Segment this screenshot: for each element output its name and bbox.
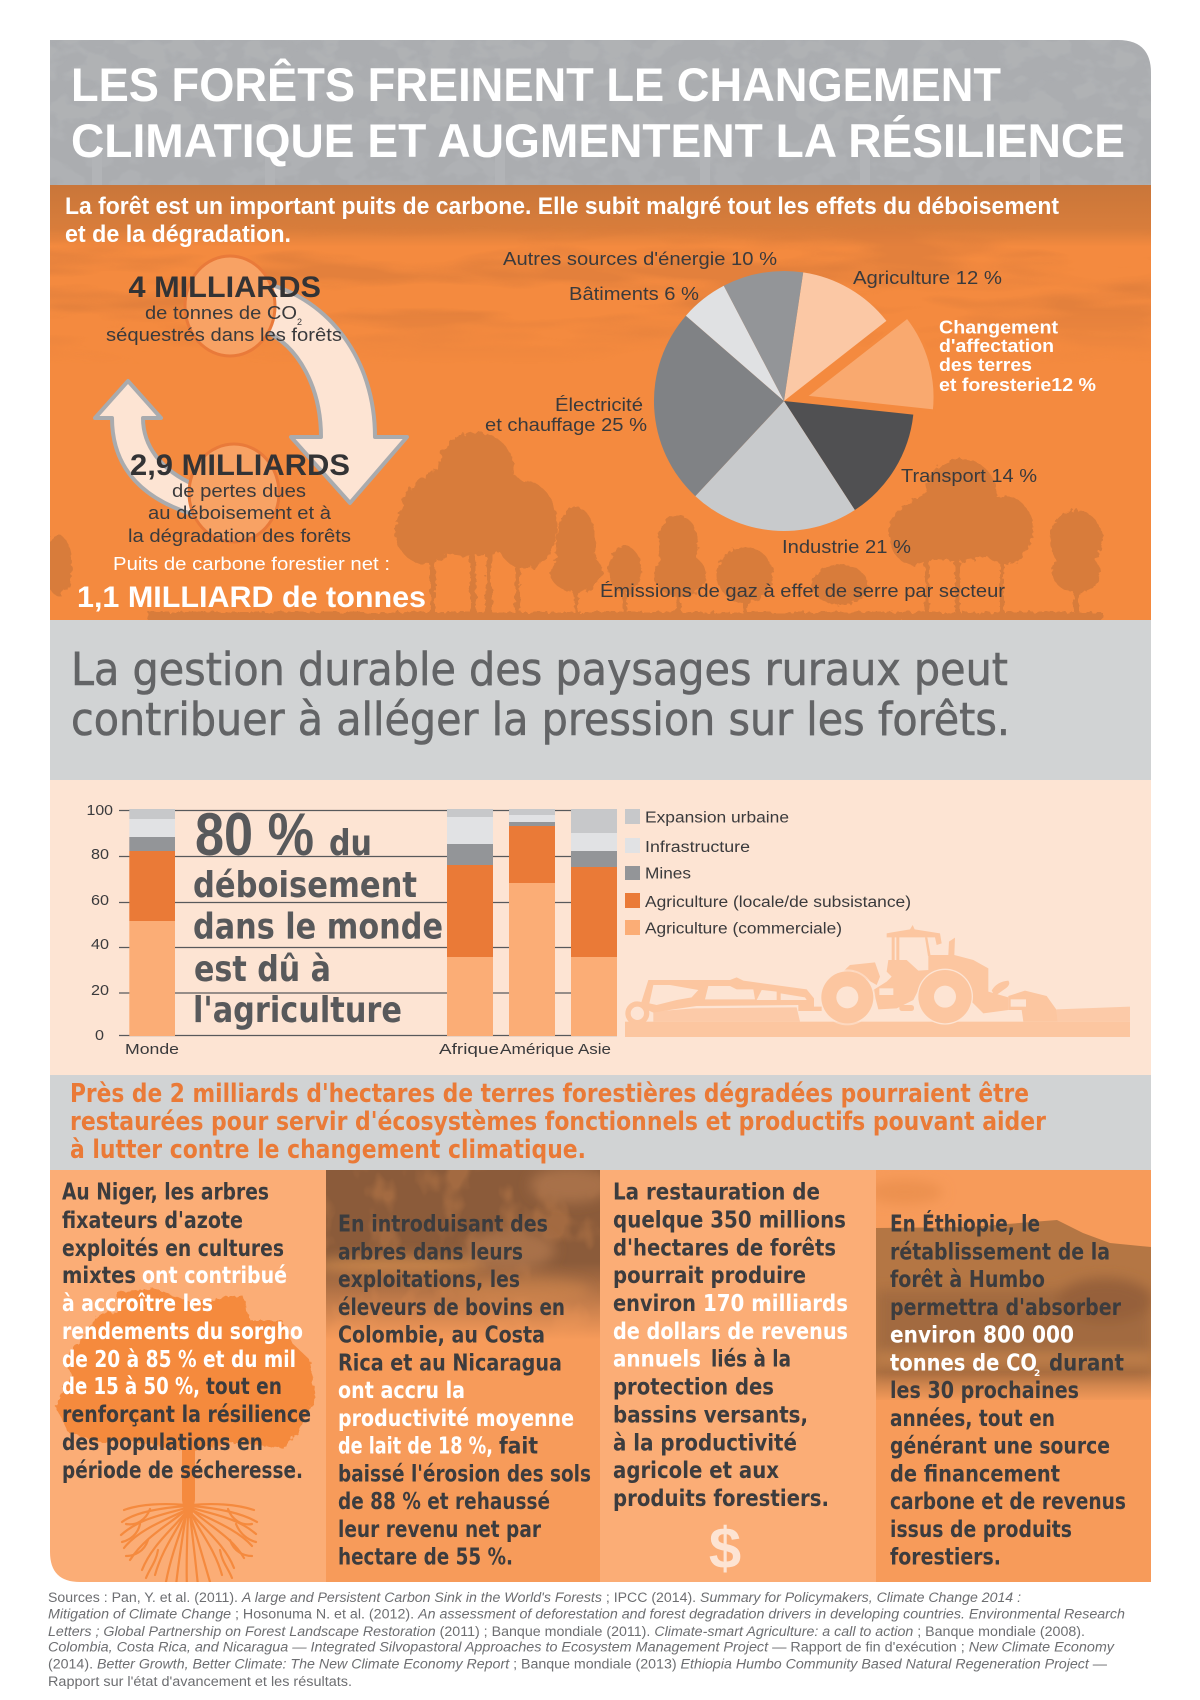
text: Latin America: de 88 % et rehaussé	[338, 1489, 550, 1515]
pie chart: emissions by sector	[654, 271, 935, 531]
axis labels: Asie	[578, 1042, 611, 1058]
axis labels: 20	[91, 983, 109, 999]
panel: restoration heading: restaurées pour servir d'écosystèmes fonctionnels et productifs pouvant aider	[70, 1107, 1046, 1137]
text: Niger: à accroître les	[62, 1291, 213, 1317]
title banner	[50, 40, 1151, 185]
pie labels: d'affectation	[939, 336, 1054, 356]
subtitle: et de la dégradation.	[65, 221, 291, 248]
stacked bar: Afrique	[447, 809, 493, 1036]
text: restoration value: liés à la	[711, 1347, 791, 1373]
panel: deforestation chart	[50, 780, 1151, 1075]
axis grid	[119, 810, 617, 1036]
pie labels: Transport 14 %	[901, 466, 1037, 486]
subtitle: La forêt est un important puits de carbone. Elle subit malgré tout les effets du déboisement	[65, 193, 1059, 220]
pie labels: Bâtiments 6 %	[569, 284, 699, 304]
sources: Mitigation of Climate Change ; Hosonuma N. et al. (2012). An assessment of deforestation and forest degradation drivers in developing countries. Environmental Research	[48, 1607, 1125, 1622]
text: Latin America: hectare de 55 %.	[338, 1545, 513, 1571]
sources: (2014). Better Growth, Better Climate: The New Climate Economy Report ; Banque mondiale (2013) Ethiopia Humbo Community Based Natural Regeneration Project —	[48, 1657, 1108, 1672]
text: Niger: rendements du sorgho	[62, 1319, 303, 1345]
sources: Letters ; Global Partnership on Forest Landscape Restoration (2011) ; Banque mondiale (2011). Climate-smart Agriculture: a call to action ; Banque mondiale (2008).	[48, 1624, 1085, 1639]
text: restoration value: environ	[613, 1291, 696, 1317]
panel: sustainable landscapes heading: contribuer à alléger la pression sur les forêts.	[71, 693, 1010, 746]
subtitle	[65, 193, 1059, 248]
callout: 80 percent: dans le monde	[193, 907, 443, 948]
photo: Humbo landscape	[876, 1184, 1151, 1398]
text: Niger: tout en	[206, 1374, 282, 1400]
title text: CLIMATIQUE ET AUGMENTENT LA RÉSILIENCE	[71, 114, 1125, 167]
text: Niger: Au Niger, les arbres	[62, 1180, 269, 1206]
stat: 4 milliards: 4 MILLIARDS	[128, 271, 321, 304]
text: Niger: période de sécheresse.	[62, 1458, 303, 1484]
legend: Mines	[645, 866, 691, 883]
text: Latin America: leur revenu net par	[338, 1517, 542, 1543]
text: Latin America: ont accru la	[338, 1378, 465, 1404]
circle: sequestered carbon	[185, 256, 275, 356]
legend: Agriculture (locale/de subsistance)	[645, 894, 911, 911]
pie labels: Industrie 21 %	[782, 537, 911, 557]
text: Ethiopia: 2	[1034, 1369, 1040, 1379]
text: restoration value	[613, 1180, 848, 1512]
text: restoration value: de dollars de revenus	[613, 1319, 848, 1345]
text: restoration value: pourrait produire	[613, 1263, 806, 1289]
text: Niger: ont contribué	[142, 1263, 287, 1289]
photo: cattle under trees	[326, 1170, 600, 1334]
pie labels: des terres	[939, 355, 1032, 375]
text: Latin America	[338, 1212, 591, 1571]
text: Ethiopia: générant une source	[890, 1434, 1110, 1460]
axis labels: 0	[95, 1028, 104, 1044]
panel: Latin America	[310, 1167, 610, 1582]
text: Latin America: productivité moyenne	[338, 1406, 574, 1432]
axis labels	[86, 803, 611, 1058]
stat: net sink	[77, 554, 426, 614]
text: Latin America: éleveurs de bovins en	[338, 1295, 565, 1321]
sources	[48, 1590, 1125, 1689]
axis labels: Amérique	[500, 1042, 574, 1058]
text: Niger: mixtes	[62, 1263, 136, 1289]
text: Ethiopia: forêt à Humbo	[890, 1267, 1045, 1293]
text: restoration value: à la productivité	[613, 1430, 797, 1456]
callout: 80 percent: déboisement	[193, 865, 417, 906]
text: Niger: fixateurs d'azote	[62, 1208, 243, 1234]
text: Niger: de 20 à 85 % et du mil	[62, 1347, 296, 1373]
stat: 4 milliards	[106, 271, 342, 345]
stat: 2,9 milliards: au déboisement et à	[148, 503, 332, 523]
pie labels: et foresterie12 %	[939, 375, 1096, 395]
text: Ethiopia: issus de produits	[890, 1517, 1072, 1543]
text: restoration value: d'hectares de forêts	[613, 1235, 836, 1261]
title text: LES FORÊTS FREINENT LE CHANGEMENT	[71, 58, 1001, 111]
panel: restoration heading: à lutter contre le changement climatique.	[70, 1135, 586, 1165]
panel: Niger	[50, 1170, 326, 1588]
text: restoration value: annuels	[613, 1347, 701, 1373]
text: Ethiopia: de financement	[890, 1461, 1060, 1487]
axis labels: 60	[91, 893, 109, 909]
stat: 4 milliards: 2	[297, 317, 302, 327]
background clouds	[50, 237, 1151, 338]
callout: 80 percent: est dû à	[194, 949, 331, 990]
stat: net sink: Puits de carbone forestier net :	[113, 554, 390, 574]
text: Latin America: Colombie, au Costa	[338, 1323, 545, 1349]
text: Niger: exploités en cultures	[62, 1236, 284, 1262]
icon: tractor	[625, 925, 1130, 1037]
pie labels: Électricité	[555, 395, 643, 415]
panel: Ethiopia	[867, 1170, 1153, 1582]
panel: restoration heading	[50, 1075, 1151, 1170]
sources: Colombia, Costa Rica, and Nicaragua — Integrated Silvopastoral Approaches to Ecosystem Management Project — Rapport de fin d'exécution ; New Climate Economy	[48, 1640, 1115, 1655]
text: Niger: de 15 à 50 %,	[62, 1374, 200, 1400]
text: restoration value: 170 milliards	[703, 1291, 848, 1317]
axis labels: 100	[86, 803, 113, 819]
callout: 80 percent: l'agriculture	[193, 990, 402, 1031]
text: Ethiopia: carbone et de revenus	[890, 1489, 1126, 1515]
pie labels	[485, 249, 1096, 601]
text: restoration value: produits forestiers.	[613, 1486, 829, 1512]
background forest silhouettes	[44, 432, 1102, 622]
stat: 2,9 milliards: 2,9 MILLIARDS	[130, 449, 350, 482]
panel: carbon sink	[44, 185, 1151, 622]
icon: tree with roots	[55, 1289, 315, 1588]
sources: Rapport sur l'état d'avancement et les résultats.	[48, 1674, 352, 1689]
stat: net sink: 1,1 MILLIARD de tonnes	[77, 581, 426, 614]
arrow: losses back to forest	[95, 381, 195, 515]
stacked bar: Monde	[129, 809, 175, 1036]
title text	[71, 58, 1125, 167]
text: Ethiopia: environ 800 000	[890, 1323, 1074, 1349]
text: Ethiopia: rétablissement de la	[890, 1239, 1110, 1265]
callout: 80 percent: du	[329, 823, 372, 864]
text: Ethiopia: forestiers.	[890, 1545, 1001, 1571]
text: Ethiopia: En Éthiopie, le	[890, 1210, 1040, 1238]
title background trees	[50, 40, 1151, 185]
axis labels: 80	[91, 847, 109, 863]
legend: Agriculture (commerciale)	[645, 921, 842, 938]
stat: 4 milliards: séquestrés dans les forêts	[106, 325, 342, 345]
legend	[625, 809, 911, 938]
pie labels: Changement	[939, 318, 1058, 338]
text: restoration value: quelque 350 millions	[613, 1208, 846, 1234]
text: Ethiopia: tonnes de CO	[890, 1350, 1037, 1376]
stat: 4 milliards: de tonnes de CO	[145, 303, 297, 323]
text: Latin America: En introduisant des	[338, 1212, 548, 1238]
text: restoration value: bassins versants,	[613, 1402, 808, 1428]
circle: carbon losses	[189, 444, 279, 542]
text: Latin America: de lait de 18 %,	[338, 1434, 493, 1460]
text: Latin America: fait	[499, 1434, 538, 1460]
text: Ethiopia	[890, 1210, 1126, 1571]
text: restoration value: agricole et aux	[613, 1458, 779, 1484]
callout: 80 percent	[193, 801, 443, 1031]
pie labels: Agriculture 12 %	[853, 268, 1002, 288]
pie labels: Autres sources d'énergie 10 %	[503, 249, 777, 269]
panel: sustainable landscapes heading: La gestion durable des paysages ruraux peut	[71, 643, 1008, 696]
text: Niger	[62, 1180, 311, 1484]
stacked bar: Amérique	[509, 809, 555, 1036]
text: Ethiopia: les 30 prochaines	[890, 1378, 1079, 1404]
panel: restoration value	[600, 1170, 876, 1582]
panel: sustainable landscapes heading	[50, 620, 1151, 780]
callout: 80 percent: 80 %	[195, 801, 314, 868]
text: Ethiopia: durant	[1049, 1350, 1124, 1376]
pie labels: Émissions de gaz à effet de serre par secteur	[600, 581, 1005, 601]
text: Ethiopia: permettra d'absorber	[890, 1295, 1122, 1321]
arrow: forest to losses	[262, 283, 407, 503]
text: Niger: des populations en	[62, 1430, 263, 1456]
icon: dollar sign: $	[709, 1516, 741, 1581]
stat: 2,9 milliards: la dégradation des forêts	[128, 526, 351, 546]
panel: restoration heading: Près de 2 milliards d'hectares de terres forestières dégradées pourraient être	[70, 1079, 1029, 1109]
stat: 2,9 milliards	[128, 449, 351, 546]
axis labels: Afrique	[439, 1042, 499, 1058]
text: Latin America: Rica et au Nicaragua	[338, 1350, 562, 1376]
stat: 2,9 milliards: de pertes dues	[172, 481, 306, 501]
stacked bar: Asie	[571, 809, 617, 1036]
text: Latin America: arbres dans leurs	[338, 1239, 523, 1265]
text: restoration value: protection des	[613, 1375, 774, 1401]
axis labels: 40	[91, 937, 109, 953]
legend: Expansion urbaine	[645, 810, 789, 826]
text: Latin America: baissé l'érosion des sols	[338, 1461, 591, 1487]
text: Latin America: exploitations, les	[338, 1267, 520, 1293]
text: Ethiopia: années, tout en	[890, 1406, 1055, 1432]
legend: Infrastructure	[645, 839, 750, 856]
sources: Sources : Pan, Y. et al. (2011). A large and Persistent Carbon Sink in the World's Forests ; IPCC (2014). Summary for Policymakers, Climate Change 2014 :	[48, 1590, 1021, 1605]
text: Niger: renforçant la résilience	[62, 1402, 311, 1428]
axis labels: Monde	[125, 1042, 179, 1058]
text: restoration value: La restauration de	[613, 1180, 820, 1206]
pie labels: et chauffage 25 %	[485, 415, 647, 435]
